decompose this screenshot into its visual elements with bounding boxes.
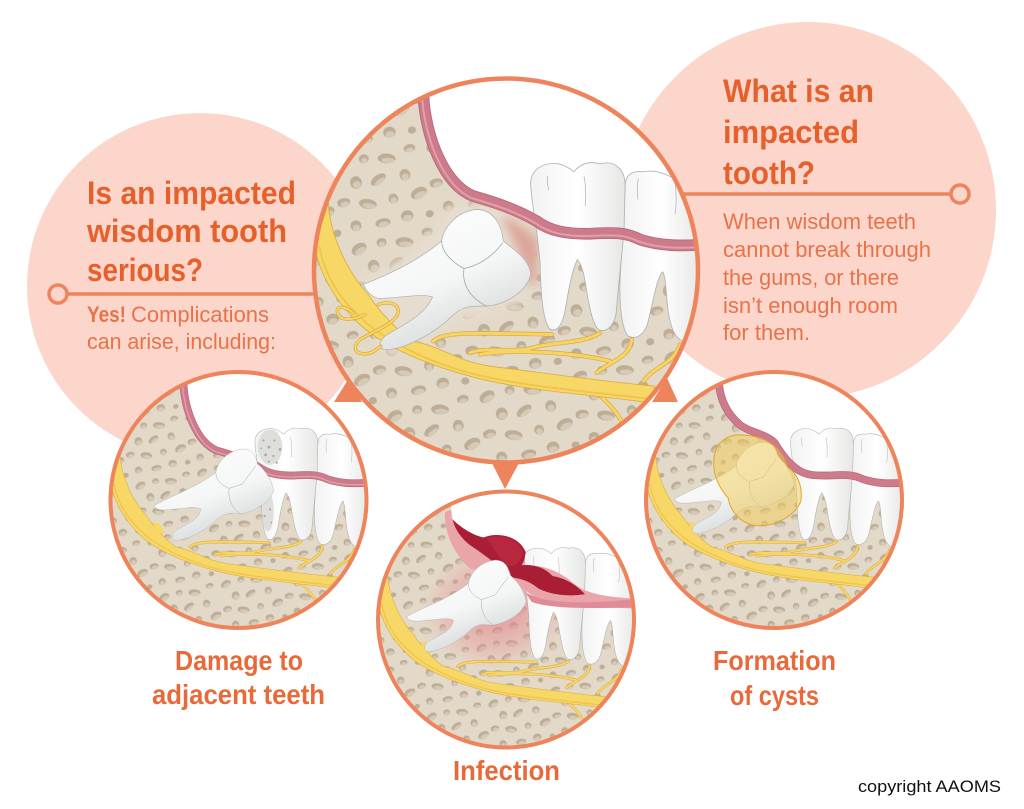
text: definition: isn’t enough room bbox=[723, 293, 898, 318]
panel: main impacted tooth illustration bbox=[310, 74, 710, 474]
bone patch under displaced gum bbox=[724, 412, 782, 461]
text: complications intro: can arise, including: bbox=[87, 329, 276, 354]
text: definition: the gums, or there bbox=[723, 265, 899, 290]
socket halo bbox=[360, 204, 535, 352]
heading: what is an impacted tooth: What is an bbox=[723, 73, 874, 109]
text: complications intro bbox=[87, 302, 276, 354]
wisdom tooth bbox=[154, 449, 273, 541]
wisdom tooth bbox=[407, 560, 526, 652]
displaced gum bbox=[719, 383, 910, 483]
inflamed socket bbox=[502, 216, 538, 288]
heading: is an impacted wisdom tooth serious: serious? bbox=[87, 252, 203, 288]
arrow: to right circle bbox=[652, 378, 678, 402]
text: definition: cannot break through bbox=[723, 237, 931, 262]
pink circle: what is an impacted tooth bbox=[620, 22, 996, 398]
arrow: to bottom circle bbox=[492, 463, 519, 489]
panel: damage to adjacent teeth bbox=[108, 369, 374, 636]
pink circle: is it serious bbox=[27, 113, 373, 459]
label: formation of cysts: of cysts bbox=[730, 680, 819, 711]
label: damage to adjacent teeth: adjacent teeth bbox=[152, 679, 325, 710]
text: definition bbox=[723, 209, 931, 345]
heading: is an impacted wisdom tooth serious: Is an impacted bbox=[87, 175, 296, 211]
label: formation of cysts: Formation bbox=[713, 645, 836, 676]
label: infection: Infection bbox=[453, 755, 560, 786]
panel: infection bbox=[375, 489, 642, 755]
text: definition: When wisdom teeth bbox=[723, 209, 916, 234]
connector line: left bbox=[49, 285, 322, 303]
panel: formation of cysts bbox=[643, 369, 910, 636]
damage speckle on adjacent tooth bbox=[258, 429, 282, 532]
heading: what is an impacted tooth bbox=[723, 73, 874, 191]
label: formation of cysts bbox=[713, 645, 836, 711]
text: definition: for them. bbox=[723, 320, 810, 345]
swollen gum bbox=[445, 510, 633, 608]
copyright: copyright AAOMS bbox=[858, 777, 1001, 796]
nerve loops bbox=[337, 303, 398, 354]
wisdom tooth bbox=[675, 442, 794, 534]
heading: is an impacted wisdom tooth serious bbox=[86, 175, 296, 288]
label: damage to adjacent teeth bbox=[152, 645, 325, 710]
wisdom tooth bbox=[363, 209, 531, 350]
text: complications intro: Yes! bbox=[87, 302, 126, 327]
label: damage to adjacent teeth: Damage to bbox=[175, 645, 303, 676]
arrow: to left circle bbox=[334, 378, 362, 402]
heading: is an impacted wisdom tooth serious: wisdom tooth bbox=[86, 213, 287, 249]
heading: what is an impacted tooth: tooth? bbox=[723, 155, 815, 191]
cyst sac bbox=[714, 435, 801, 526]
nerve bump bbox=[153, 522, 164, 534]
text: complications intro: Complications bbox=[131, 302, 269, 327]
connector line: right bbox=[680, 185, 969, 203]
heading: what is an impacted tooth: impacted bbox=[723, 114, 859, 150]
redness around tooth bbox=[431, 562, 558, 660]
